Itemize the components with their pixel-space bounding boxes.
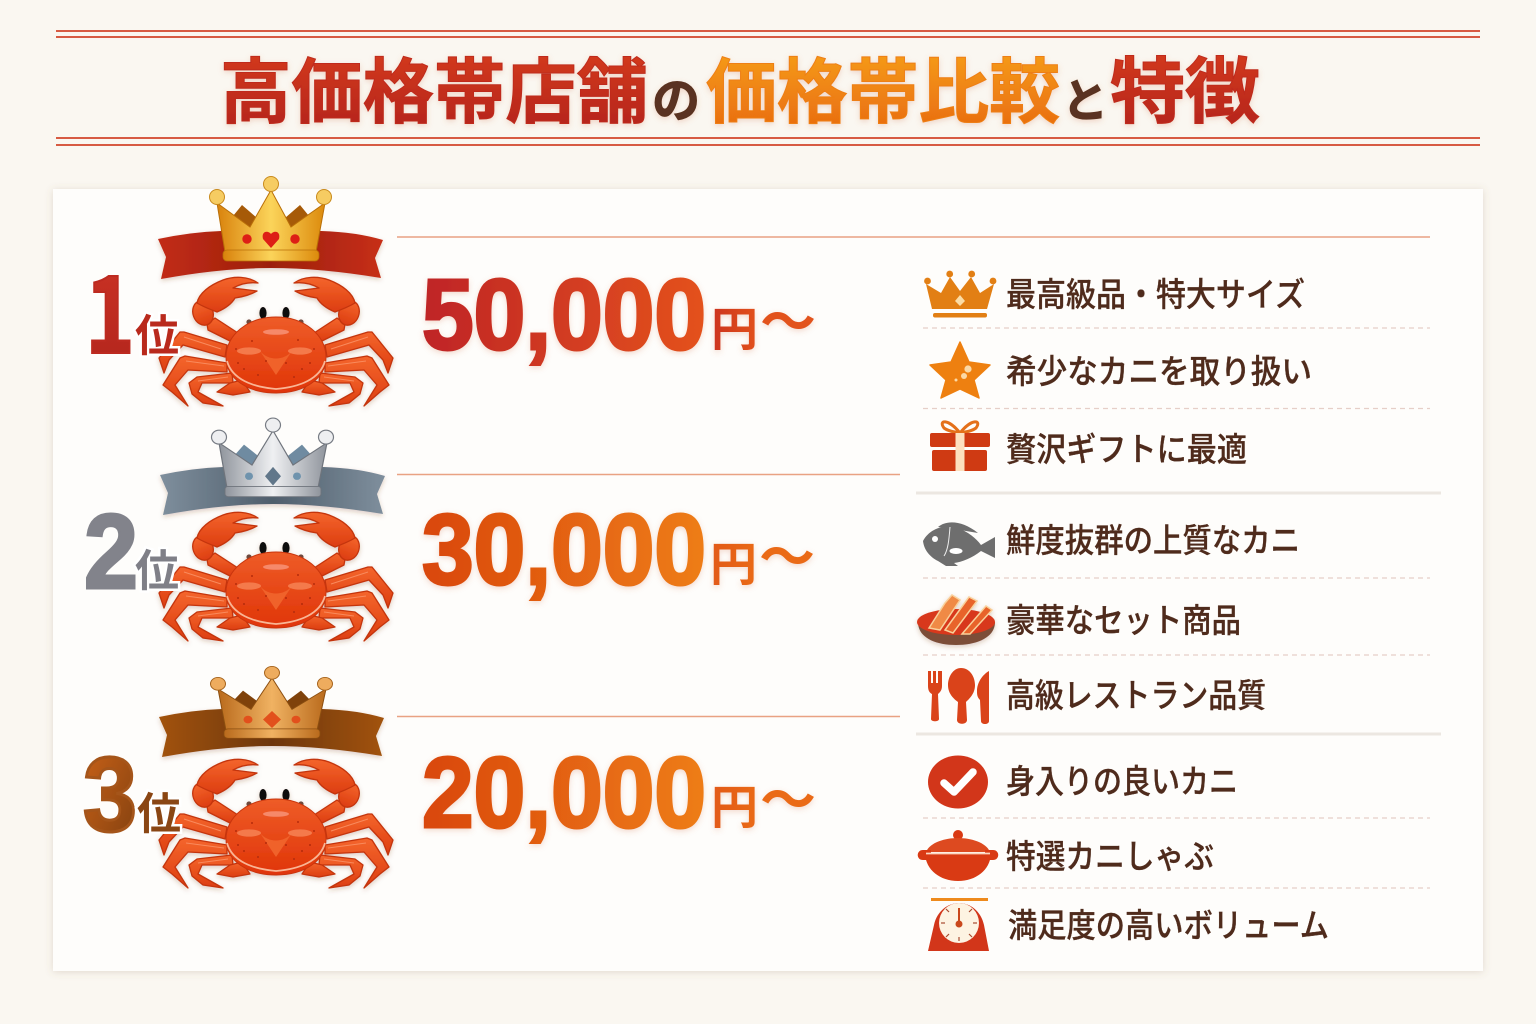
features: rank 2 [917,514,1300,724]
icon: hot pot [918,830,998,881]
icon: check mark [928,756,988,808]
title band [56,31,1480,145]
text: 特選カニしゃぶ: 特選カニしゃぶ [1006,830,1214,878]
ribbon: slate [160,467,385,515]
text: 身入りの良いカニ: 身入りの良いカニ [1006,755,1238,803]
price: 50,000円〜: 50,000 [422,259,706,371]
text: 贅沢ギフトに最適: 贅沢ギフトに最適 [1006,423,1247,471]
text: 最高級品・特大サイズ: 最高級品・特大サイズ [1006,268,1305,316]
rank 1 group [85,176,816,406]
icon: gold crown [210,176,332,261]
price: 50,000円〜: 〜 [760,278,816,359]
icon: fish [923,522,995,566]
text: 満足度の高いボリューム: 満足度の高いボリューム [1008,899,1329,947]
icon: silver crown [212,418,334,497]
price: 20,000円〜: 20,000 [422,737,706,849]
title top double rule [56,31,1480,37]
rank label: 2位: 2 [84,493,138,611]
icon: star [930,342,990,398]
title [220,53,1260,133]
price: 30,000円〜: 円 [710,526,757,595]
rank 2 group [84,418,815,641]
title: 特徴 [1110,53,1260,133]
price: 20,000円〜: 〜 [760,756,816,837]
text: 希少なカニを取り扱い: 希少なカニを取り扱い [1006,345,1312,393]
rank label: 1位: 位 [135,300,179,364]
features: rank 1 [924,268,1312,471]
icon: crown [924,271,996,318]
rank 3 group [83,666,816,888]
rank label: 1位: 1 [85,232,135,383]
crab illustration [159,759,393,888]
ribbon: brown [159,709,384,757]
rank label: 2位 [84,493,179,611]
panel: ranking card [53,189,1483,971]
price: 30,000円〜: 〜 [759,513,815,594]
title: 高価格帯店舗 [220,54,648,133]
title: と [1062,75,1108,127]
crab illustration [159,512,393,641]
rank label: 3位: 位 [137,778,181,842]
title: 価格帯比較 [706,54,1060,133]
rank label: 3位 [83,736,181,854]
icon: bronze crown [210,666,332,738]
title bottom double rule [56,138,1480,145]
icon: plate of crab legs [917,595,995,645]
ribbon: red [158,231,383,279]
rank label: 2位: 位 [135,535,179,599]
price: 30,000円〜: 30,000 [422,494,706,606]
price: 50,000円〜: 円 [711,291,758,360]
text: 豪華なセット商品: 豪華なセット商品 [1006,594,1241,642]
text: 鮮度抜群の上質なカニ: 鮮度抜群の上質なカニ [1006,514,1300,562]
crab illustration [159,277,393,406]
features: rank 3 [918,755,1329,951]
icon: kitchen scale [928,898,989,951]
icon: gift box [930,422,990,471]
rank label: 1位 [85,232,179,383]
price: 20,000円〜: 円 [711,769,758,838]
icon: fork, spoon and knife [928,668,989,724]
rank label: 3位: 3 [83,736,137,854]
title: の [652,75,700,128]
text: 高級レストラン品質: 高級レストラン品質 [1006,669,1266,717]
